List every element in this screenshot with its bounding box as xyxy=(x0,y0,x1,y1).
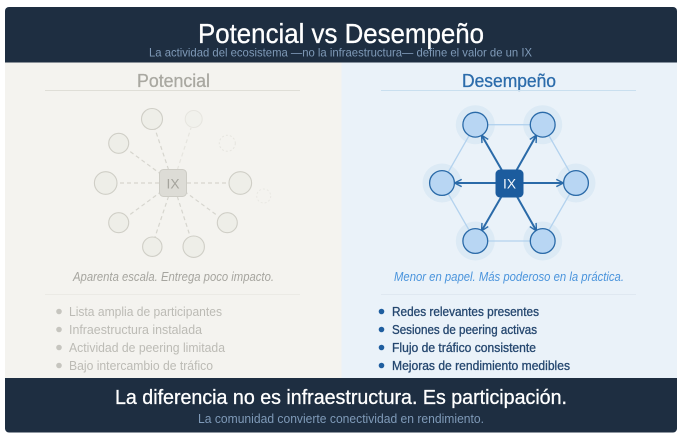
list: potencial traits: Actividad de peering limitada xyxy=(69,341,225,355)
list: desempeno traits: Flujo de tráfico consistente xyxy=(392,341,536,355)
heading: potencial: Potencial xyxy=(137,71,210,91)
caption: potencial: Aparenta escala. Entrega poco impacto. xyxy=(72,270,274,284)
list: potencial traits: Infraestructura instalada xyxy=(69,323,202,337)
node: IX active: IX xyxy=(503,176,517,192)
caption: desempeno: Menor en papel. Más poderoso en la práctica. xyxy=(394,270,624,284)
footer banner xyxy=(5,378,677,433)
footer subline: La comunidad convierte conectividad en rendimiento. xyxy=(198,412,484,426)
footer headline: La diferencia no es infraestructura. Es participación. xyxy=(115,386,567,409)
subtitle: La actividad del ecosistema —no la infraestructura— define el valor de un IX xyxy=(149,46,532,60)
list: potencial traits: Bajo intercambio de tráfico xyxy=(69,359,213,373)
node: IX muted xyxy=(160,170,186,196)
heading: desempeno: Desempeño xyxy=(462,71,556,91)
title: Potencial vs Desempeño xyxy=(198,18,484,49)
list: desempeno traits: Redes relevantes presentes xyxy=(392,305,539,319)
panel: desempeno xyxy=(342,62,678,379)
node: IX muted: IX xyxy=(166,176,180,192)
list: desempeno traits: Mejoras de rendimiento medibles xyxy=(392,359,570,373)
list: potencial traits: Lista amplia de participantes xyxy=(69,305,222,319)
list: desempeno traits xyxy=(379,305,570,373)
node: IX active xyxy=(496,170,524,198)
diagram: connected hexagon network xyxy=(422,105,596,260)
panel: potencial xyxy=(5,62,342,379)
list: desempeno traits: Sesiones de peering activas xyxy=(392,323,537,337)
header banner xyxy=(5,7,677,62)
list: potencial traits xyxy=(56,305,225,373)
diagram: scattered network xyxy=(94,108,271,257)
